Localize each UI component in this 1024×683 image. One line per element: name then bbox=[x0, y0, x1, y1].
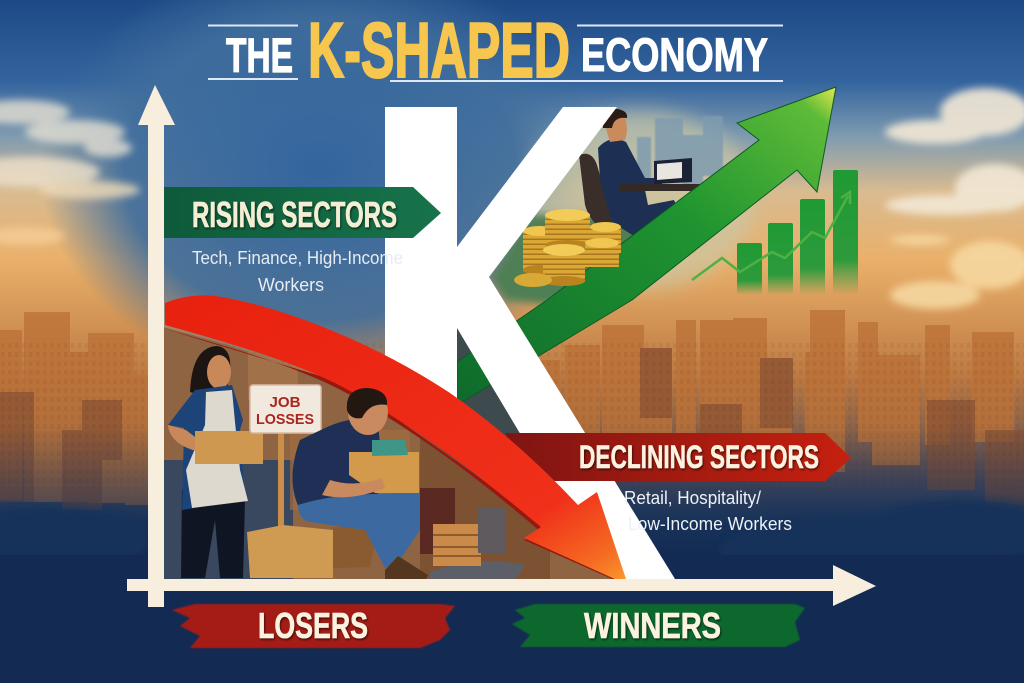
trend line bbox=[692, 192, 850, 280]
title word: ECONOMY: ECONOMY bbox=[581, 28, 768, 81]
rising sectors description: Workers bbox=[258, 275, 324, 295]
rising sectors description bbox=[192, 248, 403, 295]
bar chart icon bbox=[692, 170, 858, 295]
winners label: WINNERS bbox=[584, 605, 721, 646]
clouds right bbox=[885, 88, 1024, 309]
woman apron bbox=[186, 390, 248, 508]
woman face bbox=[207, 355, 231, 389]
arrow shadow edge bbox=[165, 329, 628, 586]
illustration: businessman at laptop bbox=[579, 109, 704, 240]
declining sectors description bbox=[624, 488, 792, 534]
declining sectors description: Low-Income Workers bbox=[628, 514, 792, 534]
blue sky glow behind chart bbox=[40, 0, 600, 385]
skyline fade to navy bbox=[0, 425, 1024, 556]
declining sectors label: DECLINING SECTORS bbox=[579, 439, 819, 475]
sign board bbox=[250, 385, 321, 433]
woman shirt bbox=[168, 385, 245, 510]
desk bbox=[619, 184, 704, 191]
box contents bbox=[372, 440, 408, 456]
title word: THE: THE bbox=[226, 30, 293, 83]
x axis arrow bbox=[127, 565, 876, 606]
man forearm bbox=[322, 478, 385, 497]
sign: job losses bbox=[250, 385, 321, 526]
man shoe bbox=[385, 556, 428, 582]
hair bbox=[603, 109, 627, 128]
man head bbox=[348, 389, 388, 435]
building windows texture bbox=[0, 340, 1024, 490]
rising sectors label: RISING SECTORS bbox=[192, 194, 397, 235]
laptop bbox=[654, 158, 692, 184]
large white K bbox=[385, 107, 675, 579]
laptop screen bbox=[657, 162, 682, 180]
sign line 2: LOSSES bbox=[256, 411, 314, 428]
man box bbox=[349, 452, 419, 493]
losers label: LOSERS bbox=[258, 605, 368, 646]
banner: declining sectors bbox=[505, 433, 851, 481]
darker foreground buildings bbox=[0, 348, 1024, 530]
clouds left bbox=[0, 100, 140, 245]
lower green haze bbox=[492, 215, 660, 310]
sign line 1: JOB bbox=[270, 394, 301, 411]
rising sectors description: Tech, Finance, High-Income bbox=[192, 248, 403, 268]
scene backdrop: rising bbox=[492, 110, 755, 310]
office towers bbox=[637, 116, 723, 187]
man torso bbox=[292, 419, 385, 512]
woman hair bbox=[190, 346, 230, 395]
title bbox=[208, 6, 783, 94]
arrow body bbox=[165, 295, 628, 585]
man jeans bbox=[298, 492, 420, 568]
band: losers bbox=[172, 604, 455, 648]
city skyline bbox=[0, 310, 1014, 505]
man hair bbox=[347, 388, 387, 418]
body bbox=[598, 139, 680, 240]
banner: rising sectors bbox=[164, 187, 441, 238]
red falling arrow bbox=[165, 295, 628, 586]
title rules bbox=[208, 26, 783, 81]
dark tree silhouettes bbox=[0, 500, 1024, 580]
illustration: gold coin stacks bbox=[514, 209, 621, 287]
illustration: boxes on ground bbox=[247, 488, 506, 578]
illustration panel: job losses bbox=[163, 320, 623, 580]
K wedge shadow bbox=[457, 325, 530, 440]
declining sectors description: Retail, Hospitality/ bbox=[624, 488, 761, 508]
head bbox=[604, 112, 627, 142]
woman legs bbox=[181, 490, 245, 578]
title word: K-SHAPED: K-SHAPED bbox=[308, 6, 570, 94]
green rising arrow bbox=[457, 87, 836, 405]
band: winners bbox=[512, 604, 805, 647]
woman arm bbox=[168, 425, 208, 452]
woman box bbox=[195, 431, 263, 464]
chair bbox=[579, 154, 645, 228]
illustration: seated man with box bbox=[292, 388, 428, 582]
bottom navy ground bbox=[0, 555, 1024, 683]
y axis arrow bbox=[138, 85, 175, 607]
illustration: woman with box bbox=[168, 346, 263, 578]
sign post bbox=[278, 433, 284, 526]
